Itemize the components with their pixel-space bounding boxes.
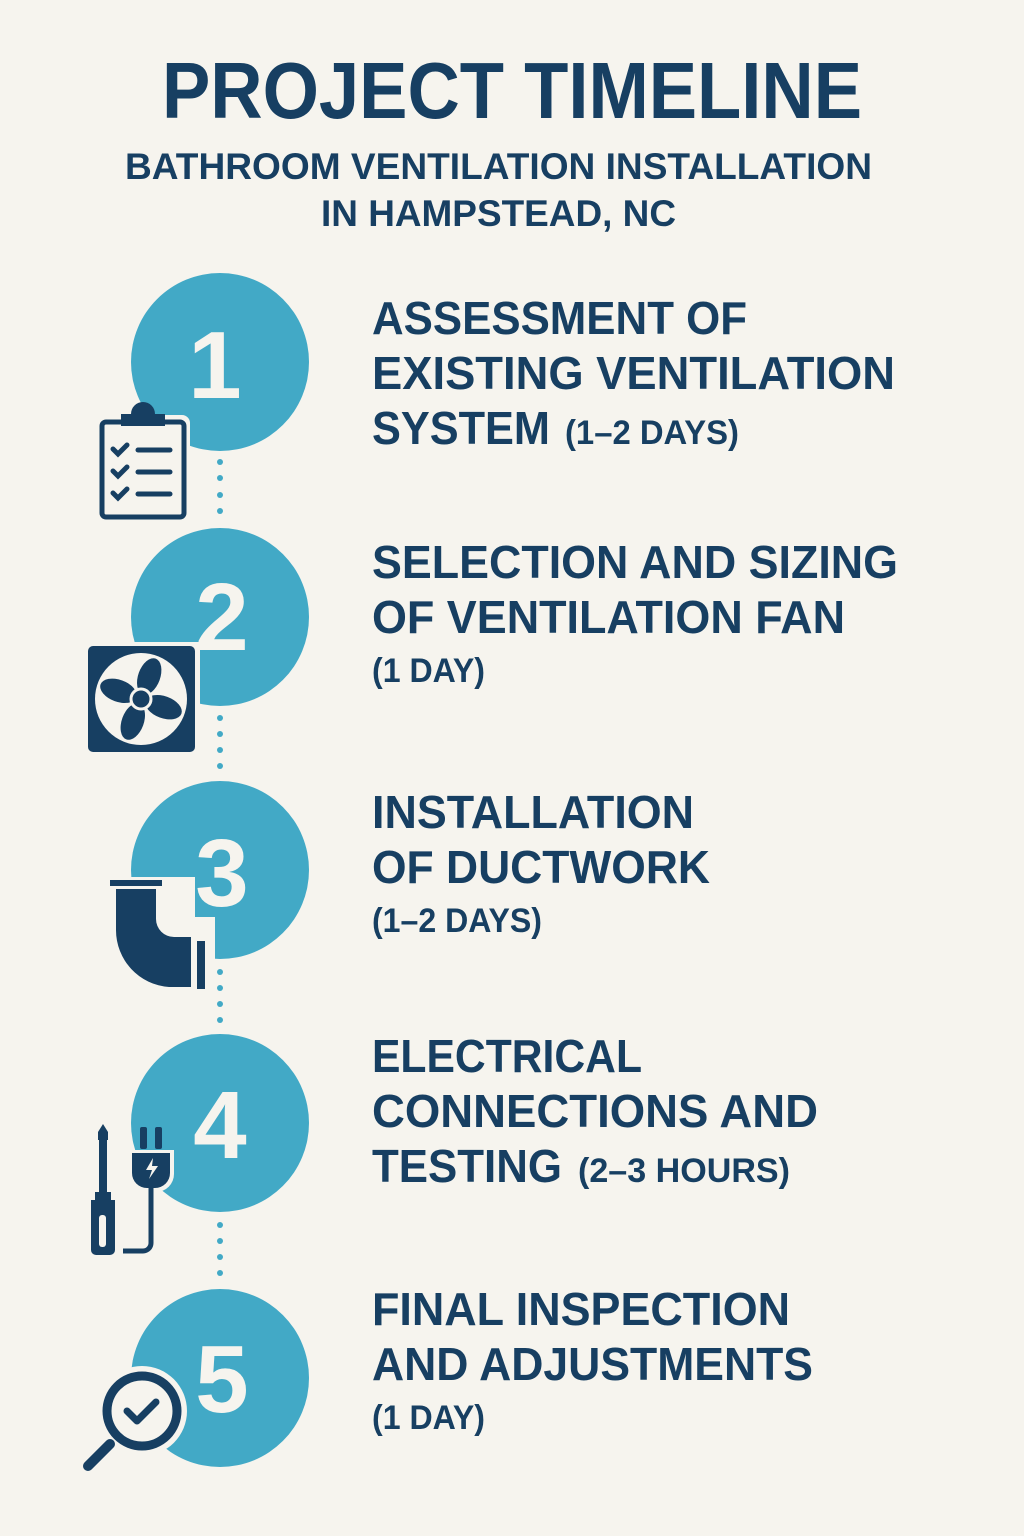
step 3 circle [131, 781, 309, 959]
step 5 circle: 5 [195, 1326, 249, 1433]
icon: duct elbow [105, 877, 215, 993]
title: PROJECT TIMELINE [162, 46, 862, 135]
step 3 text: OF DUCTWORK [372, 841, 710, 893]
step 4 circle: 4 [193, 1072, 247, 1179]
icon: clipboard [96, 402, 190, 522]
step 2 text: OF VENTILATION FAN [372, 591, 845, 643]
icon: screwdriver and plug [91, 1124, 174, 1255]
subtitle [125, 146, 872, 234]
subtitle: IN HAMPSTEAD, NC [321, 193, 676, 234]
step 4 text [372, 1030, 818, 1192]
step 4 circle [131, 1034, 309, 1212]
icon: fan [84, 642, 200, 756]
step 5 text [372, 1283, 813, 1437]
step 1 circle: 1 [188, 312, 242, 419]
step 1 text: ASSESSMENT OF [372, 292, 747, 344]
step 1 text [372, 292, 895, 454]
step 1 text: EXISTING VENTILATION [372, 347, 895, 399]
step 5 circle [131, 1289, 309, 1467]
step 2 text: (1 DAY) [372, 652, 485, 690]
dotted connectors [217, 459, 223, 1276]
step 1 text: (1–2 DAYS) [565, 414, 739, 452]
step 2 circle [131, 528, 309, 706]
subtitle: BATHROOM VENTILATION INSTALLATION [125, 146, 872, 187]
step 4 text: CONNECTIONS AND [372, 1085, 818, 1137]
step 2 text [372, 536, 898, 690]
step 5 text: AND ADJUSTMENTS [372, 1338, 813, 1390]
step 5 text: FINAL INSPECTION [372, 1283, 790, 1335]
step 3 text: INSTALLATION [372, 786, 694, 838]
step 4 text: (2–3 HOURS) [578, 1152, 790, 1190]
step 3 text: (1–2 DAYS) [372, 902, 542, 940]
step 2 text: SELECTION AND SIZING [372, 536, 898, 588]
step 4 text: ELECTRICAL [372, 1030, 642, 1082]
step 3 circle: 3 [195, 820, 249, 927]
step 3 text [372, 786, 710, 940]
step 5 text: (1 DAY) [372, 1399, 485, 1437]
step 4 text: TESTING [372, 1140, 562, 1192]
step 2 circle: 2 [195, 564, 249, 671]
icon: magnifier with check [88, 1366, 187, 1466]
step 1 text: SYSTEM [372, 402, 550, 454]
step 1 circle [131, 273, 309, 451]
